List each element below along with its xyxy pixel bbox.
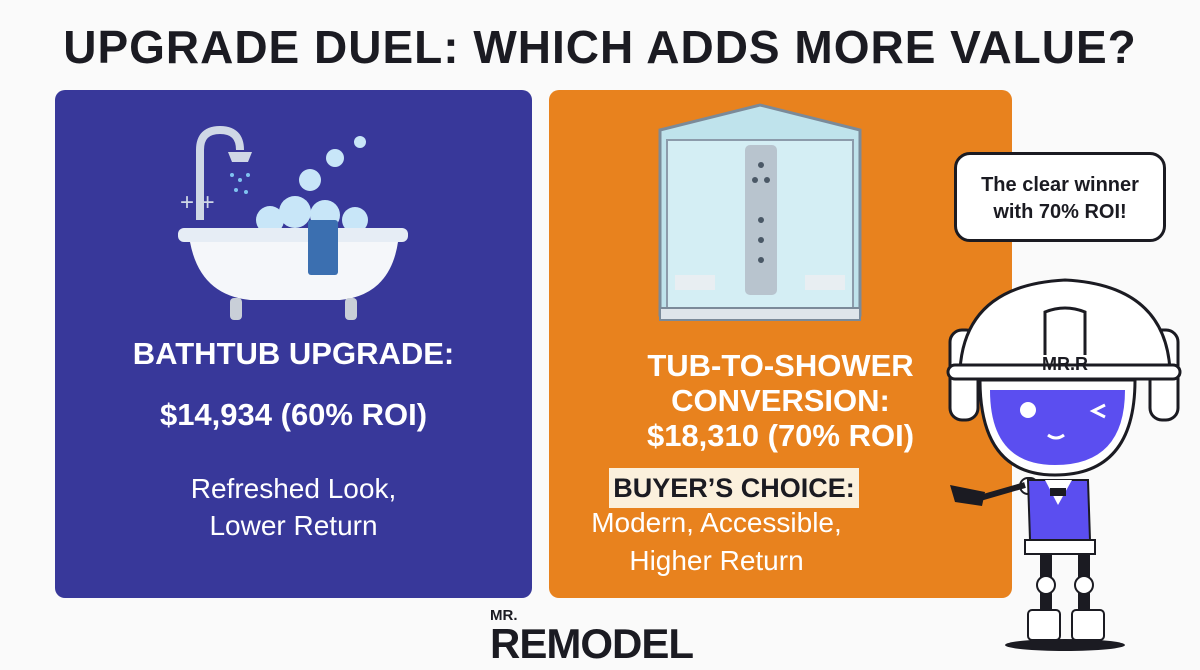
logo: mr remodel: MR. (490, 607, 518, 624)
callout: speech bubble (954, 152, 1166, 242)
text: bathtub summary: Lower Return (209, 510, 378, 541)
text: bathtub summary: Refreshed Look, (191, 473, 396, 504)
icon: bathtub: + + (180, 189, 215, 216)
banner: buyer's choice: BUYER’S CHOICE: (613, 473, 855, 503)
icon: bathtub (178, 126, 408, 320)
panel: tub-to-shower (549, 90, 1012, 598)
title: UPGRADE DUEL: WHICH ADDS MORE VALUE? (63, 21, 1137, 73)
heading: bathtub upgrade (133, 336, 454, 432)
heading: tub-to-shower conversion (647, 348, 914, 453)
logo: mr remodel: REMODEL (490, 620, 693, 667)
mascot: robot: MR.R (1042, 354, 1088, 374)
icon: shower cabin (658, 104, 862, 321)
text: shower summary: Modern, Accessible, (591, 507, 842, 538)
heading: bathtub upgrade: BATHTUB UPGRADE: (133, 336, 454, 371)
heading: tub-to-shower conversion: $18,310 (70% ROI) (647, 418, 914, 453)
callout: speech bubble: The clear winner (981, 174, 1139, 196)
heading: tub-to-shower conversion: CONVERSION: (671, 383, 890, 418)
panel: bathtub (55, 90, 532, 598)
heading: bathtub upgrade: $14,934 (60% ROI) (160, 397, 427, 432)
text: shower summary (591, 507, 842, 576)
heading: tub-to-shower conversion: TUB-TO-SHOWER (647, 348, 914, 383)
text: bathtub summary (191, 473, 396, 541)
callout: speech bubble: with 70% ROI! (993, 201, 1127, 223)
text: shower summary: Higher Return (629, 545, 804, 576)
mascot: robot (946, 278, 1182, 651)
